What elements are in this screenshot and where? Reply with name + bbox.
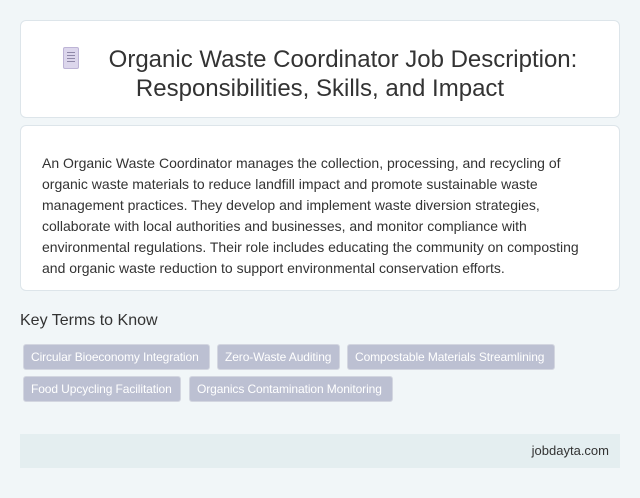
header card: [20, 20, 620, 118]
footer: jobdayta.com: [532, 443, 609, 458]
key terms tags: Circular Bioeconomy Integration: [31, 350, 199, 364]
title with icon: Organic Waste Coordinator Job Description: Responsibilities, Skills, and Impact: [109, 46, 577, 102]
footer: [20, 434, 620, 468]
key terms tags: Food Upcycling Facilitation: [31, 382, 172, 396]
icon: document: [63, 47, 79, 69]
description card: [20, 125, 620, 291]
key terms heading: Key Terms to Know: [20, 312, 158, 329]
key terms tags: Zero-Waste Auditing: [225, 350, 331, 364]
key terms tags: Organics Contamination Monitoring: [197, 382, 382, 396]
key terms tags: [23, 344, 555, 402]
description text: An Organic Waste Coordinator manages the collection, processing, and recycling of organic waste materials to reduce landfill impact and promote sustainable waste management practices. They develop and implement waste diversion strategies, collaborate with local authorities and businesses, and monitor compliance with environmental regulations. Their role includes educating the community on composting and organic waste reduction to support environmental conservation efforts.: [42, 155, 579, 276]
key terms tags: Compostable Materials Streamlining: [355, 350, 544, 364]
